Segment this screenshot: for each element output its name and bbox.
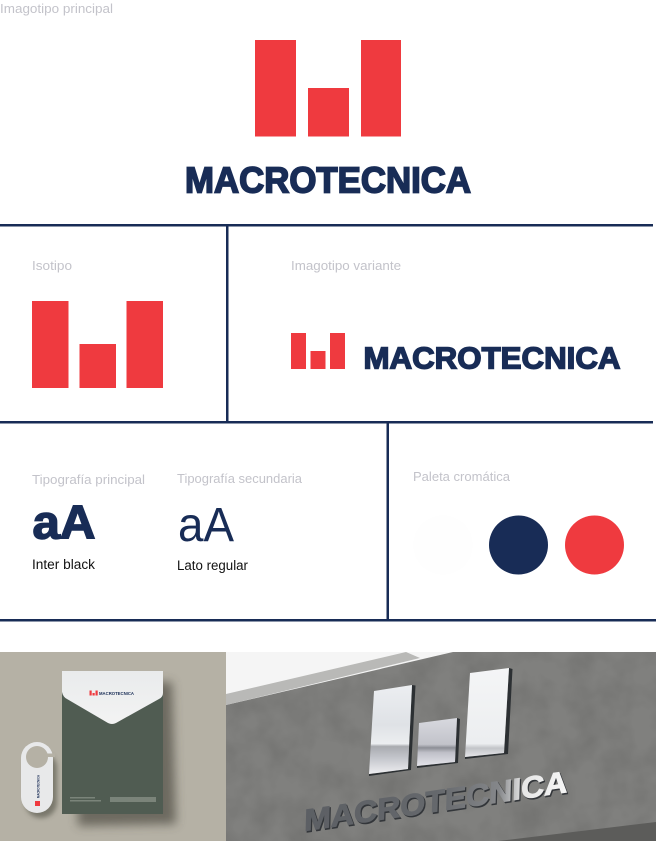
photo: building sign [226, 652, 656, 842]
sign mirror middle [417, 718, 460, 768]
label: Tipografia secundaria: Tipografía secundaria [177, 471, 303, 486]
envelope flap logo: MACROTECNICA [99, 691, 135, 696]
envelope flap [62, 671, 163, 724]
caption: Lato regular: Lato regular [177, 558, 248, 573]
swatch: white [414, 516, 472, 574]
mockup background [0, 652, 226, 841]
icon: small isotype bars [291, 333, 345, 369]
label: Isotipo: Isotipo [32, 258, 72, 273]
label: Imagotipo variante: Imagotipo variante [291, 258, 401, 273]
photo: stationery mockup [0, 652, 226, 841]
concrete wall [226, 652, 656, 842]
variant wordmark: MACROTECNICA [364, 340, 620, 376]
panel: paleta cromatica [413, 469, 624, 574]
panel: tipografia principal [32, 472, 145, 572]
specimen: bold aA: aA [32, 496, 96, 548]
sign mirror left [369, 685, 416, 776]
swatch: navy [489, 516, 548, 574]
door hanger logo [35, 775, 40, 806]
caption: Inter black: Inter black [32, 557, 95, 572]
lower dark band [500, 822, 656, 841]
sign lettering: MACROTECNICA [304, 766, 568, 838]
sign lettering: MACROTECNICA [305, 767, 569, 839]
envelope footer text [70, 797, 156, 802]
label: Tipografia principal: Tipografía principal [32, 472, 145, 487]
ledge [226, 652, 420, 705]
label: Paleta cromatica: Paleta cromática [413, 469, 511, 484]
label: Imagotipo principal: Imagotipo principal [0, 1, 113, 16]
icon: primary isotype bars [255, 40, 401, 136]
door hanger logo: MACROTECNICA [36, 775, 40, 798]
sky [226, 652, 451, 694]
envelope shadow [75, 682, 176, 826]
panel: isotipo [32, 258, 163, 388]
swatch: red [565, 516, 624, 574]
panel: primary logo [185, 40, 471, 200]
envelope body [62, 692, 163, 814]
door hanger body [21, 742, 53, 813]
sign mirror right [465, 668, 512, 759]
panel: tipografia secundaria [177, 471, 303, 573]
icon: isotype bars [32, 301, 163, 388]
grid divider lines [0, 224, 656, 622]
envelope flap logo [90, 690, 134, 696]
specimen: regular aA: aA [178, 499, 234, 552]
primary wordmark: MACROTECNICA [185, 160, 471, 200]
door hanger shadow [25, 752, 57, 818]
wall texture [226, 652, 656, 842]
panel: imagotipo variante [291, 258, 620, 376]
door hanger hole [26, 746, 55, 768]
